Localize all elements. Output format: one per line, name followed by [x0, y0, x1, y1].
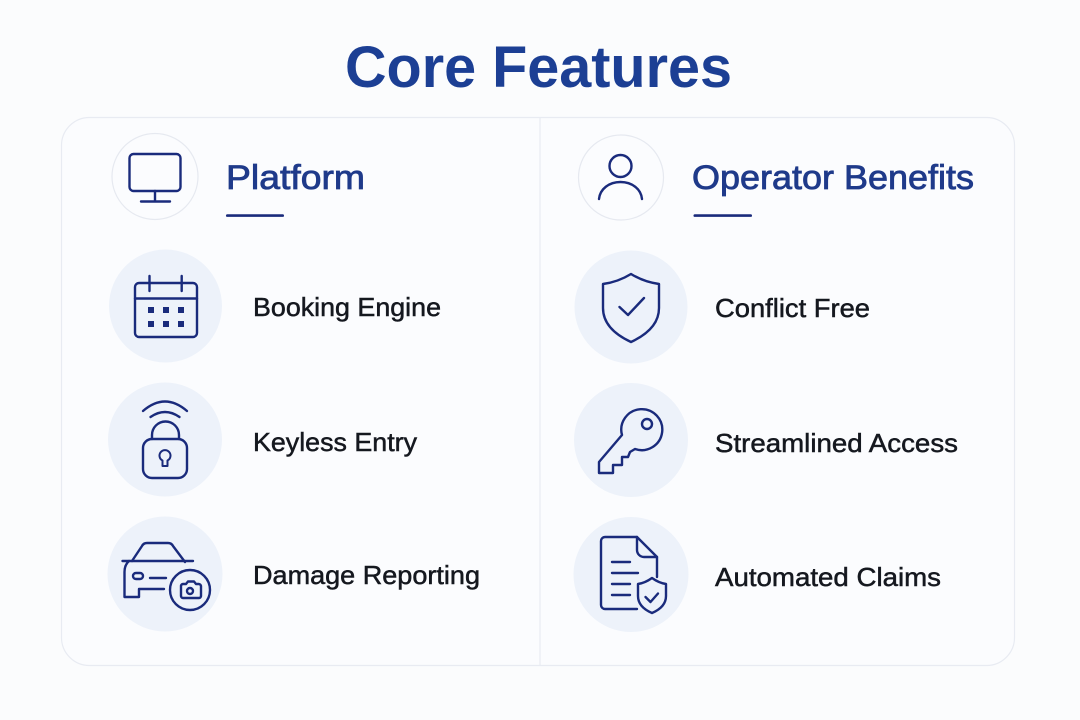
feature: streamlined access — [574, 383, 958, 497]
feature: damage reporting — [108, 516, 480, 632]
label: booking engine: Booking Engine — [253, 292, 441, 322]
icon: document with shield — [574, 517, 688, 632]
title: Core Features — [345, 35, 732, 100]
panel: operator benefits column — [574, 135, 974, 632]
heading underline — [694, 214, 752, 217]
heading: platform: Platform — [226, 159, 365, 197]
label: keyless entry: Keyless Entry — [253, 427, 417, 457]
icon: calendar — [109, 250, 222, 362]
icon: wireless padlock — [108, 382, 222, 496]
heading underline — [226, 214, 284, 217]
icon: monitor — [112, 134, 198, 220]
label: automated claims: Automated Claims — [715, 562, 941, 592]
label: damage reporting: Damage Reporting — [253, 560, 480, 590]
feature: booking engine — [109, 250, 441, 362]
feature: conflict free — [574, 250, 870, 364]
heading: operator benefits: Operator Benefits — [692, 159, 974, 197]
label: streamlined access: Streamlined Access — [715, 428, 958, 458]
feature: automated claims — [574, 517, 941, 632]
icon: person — [578, 135, 664, 220]
icon: key — [574, 383, 688, 497]
feature: keyless entry — [108, 382, 417, 496]
icon: shield check — [574, 250, 688, 364]
icon: car with camera — [108, 516, 222, 632]
panel: platform column — [108, 134, 480, 632]
label: conflict free: Conflict Free — [715, 293, 870, 323]
panel: features card — [62, 118, 1014, 666]
